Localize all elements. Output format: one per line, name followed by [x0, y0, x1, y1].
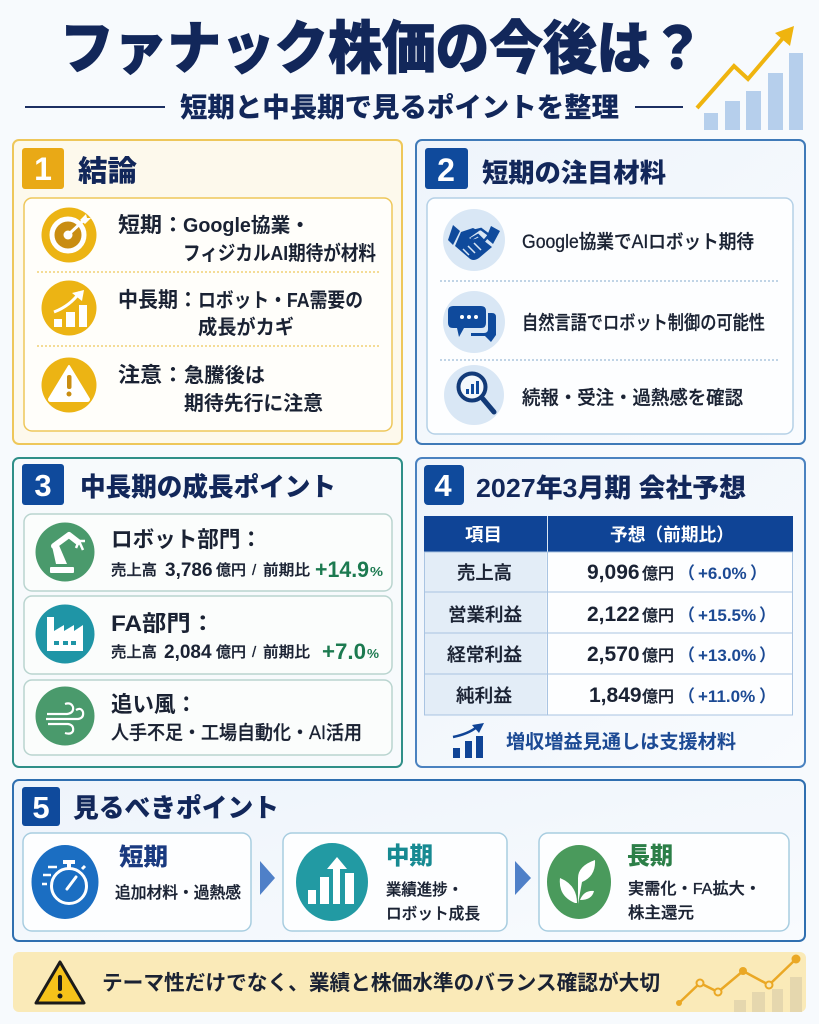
- text: FA segment: 前期比: [263, 644, 310, 661]
- icon: warning: [36, 962, 84, 1003]
- arrow: [260, 861, 275, 895]
- text: short term: [118, 214, 376, 265]
- row: ordinary profit: （: [678, 646, 695, 665]
- row: FA segment: [24, 596, 392, 674]
- text: mid term: [386, 843, 480, 923]
- panel: 5 points to watch: [13, 780, 805, 941]
- icon: growth: [42, 280, 96, 336]
- heading: short-term catalysts: 短期の注目材料: [482, 158, 666, 188]
- text: FA segment: 売上高: [111, 644, 157, 661]
- text: callout: テーマ性だけでなく、業績と株価水準のバランス確認が大切: [102, 971, 660, 995]
- text: long term: 株主還元: [628, 904, 694, 922]
- row: net profit: （: [678, 687, 695, 706]
- text: robot segment: 3,786: [165, 560, 213, 581]
- row: operating profit: 2,122: [587, 603, 640, 626]
- icon: factory: [36, 604, 94, 664]
- text: long term: [627, 843, 761, 922]
- row: operating profit: ）: [759, 606, 776, 625]
- text: mid-long term: ロボット・FA需要の: [198, 289, 363, 312]
- table header: 項目: [465, 525, 502, 545]
- chart decoration: [676, 954, 802, 1012]
- text: tailwinds: 人手不足・工場自動化・AI活用: [111, 722, 362, 744]
- panel: 2 short-term catalysts: [416, 140, 805, 444]
- row: net profit: ）: [759, 687, 776, 706]
- text: FA segment: 億円: [216, 643, 246, 661]
- text: mid-long term: [118, 289, 363, 339]
- note: supportive outlook: 増収増益見通しは支援材料: [506, 731, 736, 753]
- text: Google partnership: Google協業でAIロボット期待: [522, 231, 754, 253]
- text: FA segment: %: [367, 646, 379, 661]
- row: ordinary profit: +13.0%: [698, 646, 756, 665]
- row: ordinary profit: 経常利益: [447, 645, 522, 665]
- heading: points to watch: 見るべきポイント: [73, 793, 279, 823]
- row: operating profit: 億円: [642, 607, 674, 625]
- text: mid term: 業績進捗・: [386, 881, 463, 899]
- row: net profit: 純利益: [456, 686, 512, 706]
- row: net profit: 億円: [642, 688, 674, 706]
- card: mid term: [283, 833, 507, 931]
- icon: sprout: [547, 845, 611, 919]
- text: robot segment: 億円: [216, 561, 246, 579]
- row: ordinary profit: [447, 643, 776, 666]
- row: sales: ）: [750, 564, 767, 583]
- text: robot segment: 売上高: [111, 562, 157, 579]
- badge 3: 3: [34, 468, 52, 503]
- icon: target: [42, 208, 96, 262]
- callout: balance check: [13, 952, 806, 1012]
- heading: forecast: 2027年3月期 会社予想: [476, 473, 746, 503]
- row: operating profit: （: [678, 606, 695, 625]
- panel: 4 company forecast: [416, 458, 805, 767]
- text: FA segment: +7.0: [322, 639, 366, 664]
- text: robot segment: 前期比: [263, 562, 310, 579]
- arrow: [515, 861, 531, 895]
- text: caution: [118, 364, 323, 415]
- text: natural language: 自然言語でロボット制御の可能性: [522, 311, 765, 334]
- row: ordinary profit: 億円: [642, 647, 674, 665]
- text: mid-long term: 中長期：: [118, 289, 198, 312]
- panel: 1 conclusion: [13, 140, 402, 444]
- text: FA segment: 2,084: [164, 642, 212, 663]
- row: operating profit: +15.5%: [698, 606, 756, 625]
- row: sales: +6.0%: [698, 564, 747, 583]
- badge 4: 4: [434, 468, 452, 503]
- badge 2: [425, 148, 468, 189]
- conclusion list: [24, 198, 392, 431]
- text: robot segment: /: [252, 562, 257, 579]
- heading: conclusion: 結論: [78, 155, 137, 188]
- icon: stopwatch: [32, 845, 98, 919]
- text: mid term: ロボット成長: [386, 905, 480, 923]
- forecast table: [424, 516, 793, 715]
- text: short term: 追加材料・過熱感: [115, 884, 241, 902]
- text: short term: フィジカルAI期待が材料: [183, 241, 376, 265]
- row: net profit: 1,849: [589, 684, 642, 707]
- text: short term: 短期: [119, 844, 168, 871]
- text: FA segment: [111, 611, 379, 664]
- row: net profit: +11.0%: [698, 687, 755, 706]
- icon: caution: [42, 358, 96, 412]
- badge 1: 1: [34, 151, 52, 187]
- row: net profit: [456, 684, 776, 707]
- text: mid-long term: 成長がカギ: [198, 315, 294, 339]
- row: robot segment: [24, 514, 392, 591]
- text: robot segment: [111, 527, 383, 582]
- text: FA segment: FA部門：: [111, 611, 215, 636]
- badge 1: [22, 148, 64, 189]
- row: operating profit: [448, 603, 776, 626]
- row: sales: 売上高: [457, 563, 512, 583]
- icon: wind: [36, 686, 94, 746]
- text: short term: 短期：: [118, 214, 184, 237]
- icon: robot arm: [36, 522, 94, 582]
- text: mid term: 中期: [386, 843, 433, 870]
- text: robot segment: +14.9: [315, 557, 369, 582]
- table header: 予想（前期比）: [610, 525, 734, 545]
- row: operating profit: 営業利益: [448, 605, 522, 625]
- text: tailwinds: [111, 692, 362, 744]
- card: long term: [539, 833, 789, 931]
- heading: growth points: 中長期の成長ポイント: [80, 472, 336, 502]
- badge 5: [22, 787, 60, 826]
- badge 3: [22, 464, 64, 505]
- row: tailwinds: [24, 680, 392, 755]
- text: check reports: 続報・受注・過熱感を確認: [522, 387, 743, 409]
- icon: rising chart: [697, 26, 803, 130]
- icon: handshake: [443, 209, 505, 271]
- row: ordinary profit: ）: [759, 646, 776, 665]
- badge 2: 2: [437, 152, 455, 188]
- text: robot segment: %: [370, 564, 383, 579]
- text: long term: 長期: [627, 843, 673, 870]
- table header: [465, 525, 734, 545]
- text: short term: Google協業・: [183, 214, 310, 237]
- icon: magnifier: [444, 365, 504, 425]
- row: sales: （: [678, 564, 695, 583]
- icon: chat: [443, 291, 505, 353]
- icon: forecast bars: [453, 723, 484, 758]
- text: long term: 実需化・FA拡大・: [628, 880, 761, 898]
- subtitle: 短期と中長期で見るポイントを整理: [180, 93, 619, 123]
- badge 4: [424, 465, 464, 505]
- title: ファナック株価の今後は？: [60, 17, 704, 81]
- panel: 3 mid-long growth points: [13, 458, 402, 767]
- text: caution: 期待先行に注意: [184, 392, 323, 415]
- text: FA segment: /: [252, 644, 257, 661]
- text: caution: 急騰後は: [184, 364, 265, 387]
- text: short term: [115, 844, 241, 902]
- catalysts list: [427, 198, 793, 434]
- icon: rising bars: [296, 843, 368, 921]
- text: caution: 注意：: [118, 364, 184, 387]
- card: short term: [23, 833, 251, 931]
- row: sales: 9,096: [587, 561, 640, 584]
- row: sales: [457, 561, 767, 584]
- badge 5: 5: [32, 790, 50, 825]
- text: tailwinds: 追い風：: [111, 692, 197, 717]
- row: sales: 億円: [642, 565, 674, 583]
- text: robot segment: ロボット部門：: [111, 527, 262, 552]
- row: ordinary profit: 2,570: [587, 643, 640, 666]
